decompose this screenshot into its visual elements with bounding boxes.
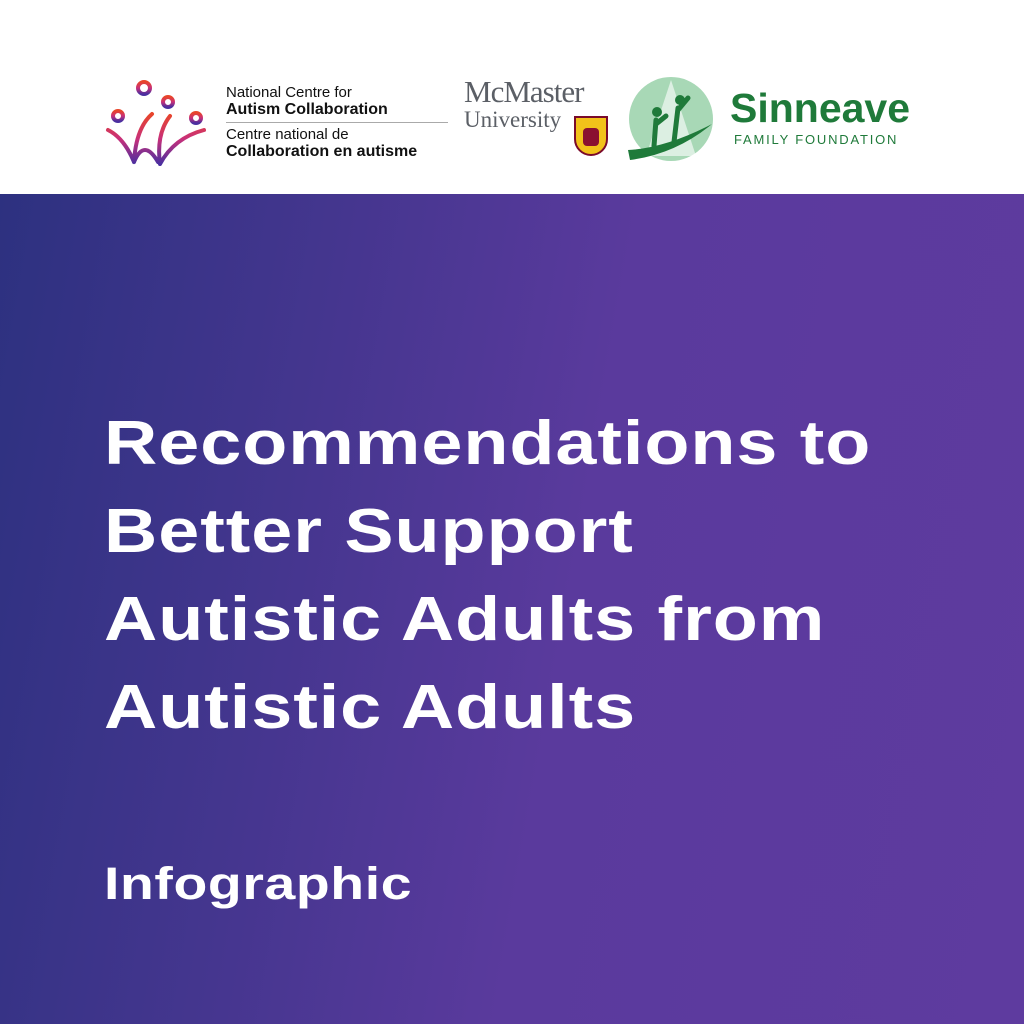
- logo: NCAC icon: [106, 80, 206, 166]
- logo: Sinneave text: FAMILY FOUNDATION: [734, 132, 898, 147]
- logo: McMaster: McMaster: [464, 74, 583, 109]
- title: [104, 409, 871, 742]
- logo: NCAC text: Autism Collaboration: [226, 101, 388, 118]
- title: Autistic Adults from: [104, 585, 825, 654]
- logo: McMaster: [464, 74, 608, 156]
- logo: NCAC text: Centre national de: [226, 126, 349, 143]
- logo: NCAC text: National Centre for: [226, 84, 352, 101]
- title: Autistic Adults: [104, 673, 636, 742]
- title: Recommendations to: [104, 409, 871, 478]
- logo: NCAC text: Collaboration en autisme: [226, 143, 417, 160]
- logo: Sinneave text: Sinneave: [730, 85, 910, 131]
- logo: McMaster: University: [464, 107, 561, 132]
- header: logos band: [0, 0, 1024, 194]
- logo: Sinneave icon: [628, 77, 713, 161]
- logo: NCAC text: [226, 84, 448, 160]
- subtitle: Infographic: [104, 858, 412, 909]
- title: Better Support: [104, 497, 634, 566]
